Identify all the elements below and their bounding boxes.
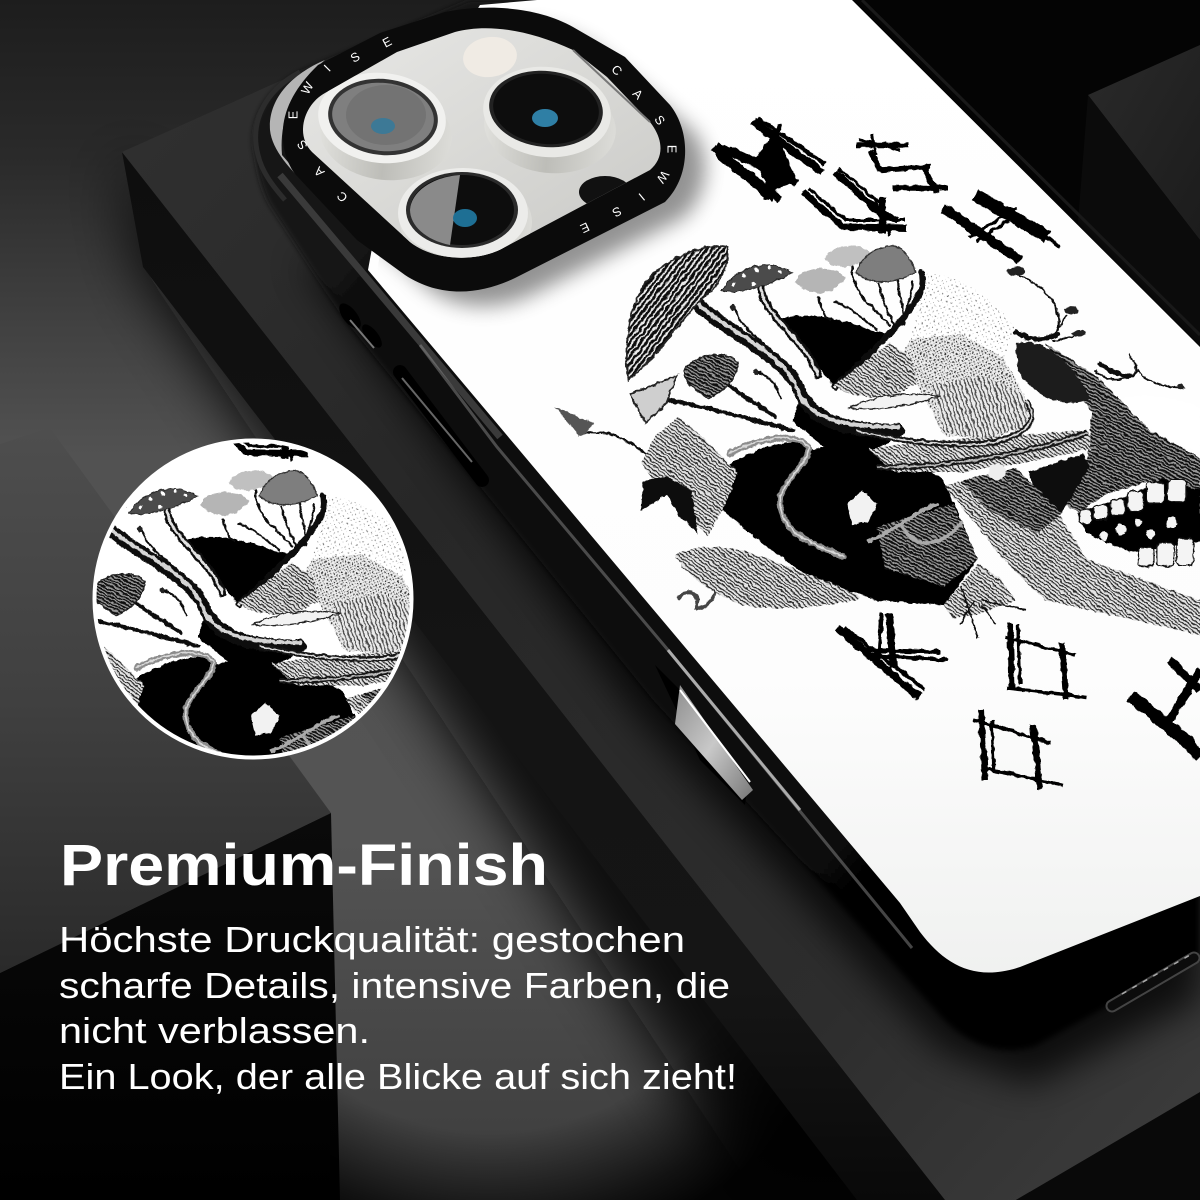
ring lettering: E xyxy=(578,219,592,236)
ring lettering: C xyxy=(609,62,625,78)
white printed back xyxy=(368,0,1200,972)
ring lettering: E xyxy=(664,145,678,153)
black lens ring xyxy=(283,8,685,292)
lens: half reflected bottom xyxy=(398,168,532,268)
body text: Ein Look, der alle Blicke auf sich zieht! xyxy=(59,1056,737,1097)
phone rim bevel xyxy=(256,72,300,200)
title: Premium-Finish xyxy=(60,833,548,898)
bottom port xyxy=(1112,955,1194,1006)
body text: nicht verblassen. xyxy=(59,1010,370,1051)
upper side button xyxy=(335,300,385,351)
gray sliver beside ring xyxy=(270,60,325,190)
chrome rim line xyxy=(420,345,912,948)
phone: full case xyxy=(253,0,1200,1050)
ring lettering: W xyxy=(653,168,672,186)
block: main pedestal side face xyxy=(122,152,945,1200)
ring lettering: S xyxy=(610,203,624,220)
overlay: spotlight falloff xyxy=(330,700,1030,1200)
block: lower left black side xyxy=(0,813,340,1200)
lens: gray left xyxy=(318,73,446,180)
glass window xyxy=(303,28,660,258)
phone case outer body xyxy=(253,0,1200,1050)
ring lettering: E xyxy=(286,111,300,119)
lower side button xyxy=(400,372,482,480)
block: upper right pedestal xyxy=(1075,45,1200,400)
ring lettering: C xyxy=(334,189,350,205)
detail magnifier circle xyxy=(92,438,414,760)
shadow: soft shadow of the main pedestal xyxy=(122,152,945,1200)
block: lower right black side xyxy=(1016,1092,1200,1200)
inset artwork xyxy=(96,442,410,756)
ring lettering: I xyxy=(321,62,334,75)
ring lettering: A xyxy=(630,86,646,103)
inset border xyxy=(94,440,412,758)
shadow: phone on pedestal xyxy=(300,260,1200,1085)
ring lettering: A xyxy=(311,163,327,180)
body text: scharfe Details, intensive Farben, die xyxy=(59,965,730,1006)
background: dark upper right area xyxy=(800,0,1200,420)
silver side button xyxy=(655,665,753,805)
inset background xyxy=(95,441,411,757)
ring lettering: I xyxy=(636,190,648,203)
ring lettering xyxy=(286,34,678,236)
block: small left pedestal top xyxy=(0,428,331,973)
flash xyxy=(463,37,517,77)
lens: black right xyxy=(483,67,615,174)
ring lettering: E xyxy=(380,34,394,51)
body text: Höchste Druckqualität: gestochen xyxy=(59,919,685,960)
camera bump xyxy=(270,8,705,306)
sensor dot xyxy=(579,176,626,204)
bump shadow xyxy=(308,26,705,306)
ring lettering: S xyxy=(651,113,668,128)
ring lettering: W xyxy=(298,79,317,97)
printed artwork xyxy=(555,118,1200,789)
ring lettering: S xyxy=(294,137,311,152)
glass edge highlight xyxy=(573,50,650,122)
dark gray bevel beside the back xyxy=(280,175,500,437)
body text xyxy=(59,919,737,1097)
ring lettering: S xyxy=(348,49,362,66)
